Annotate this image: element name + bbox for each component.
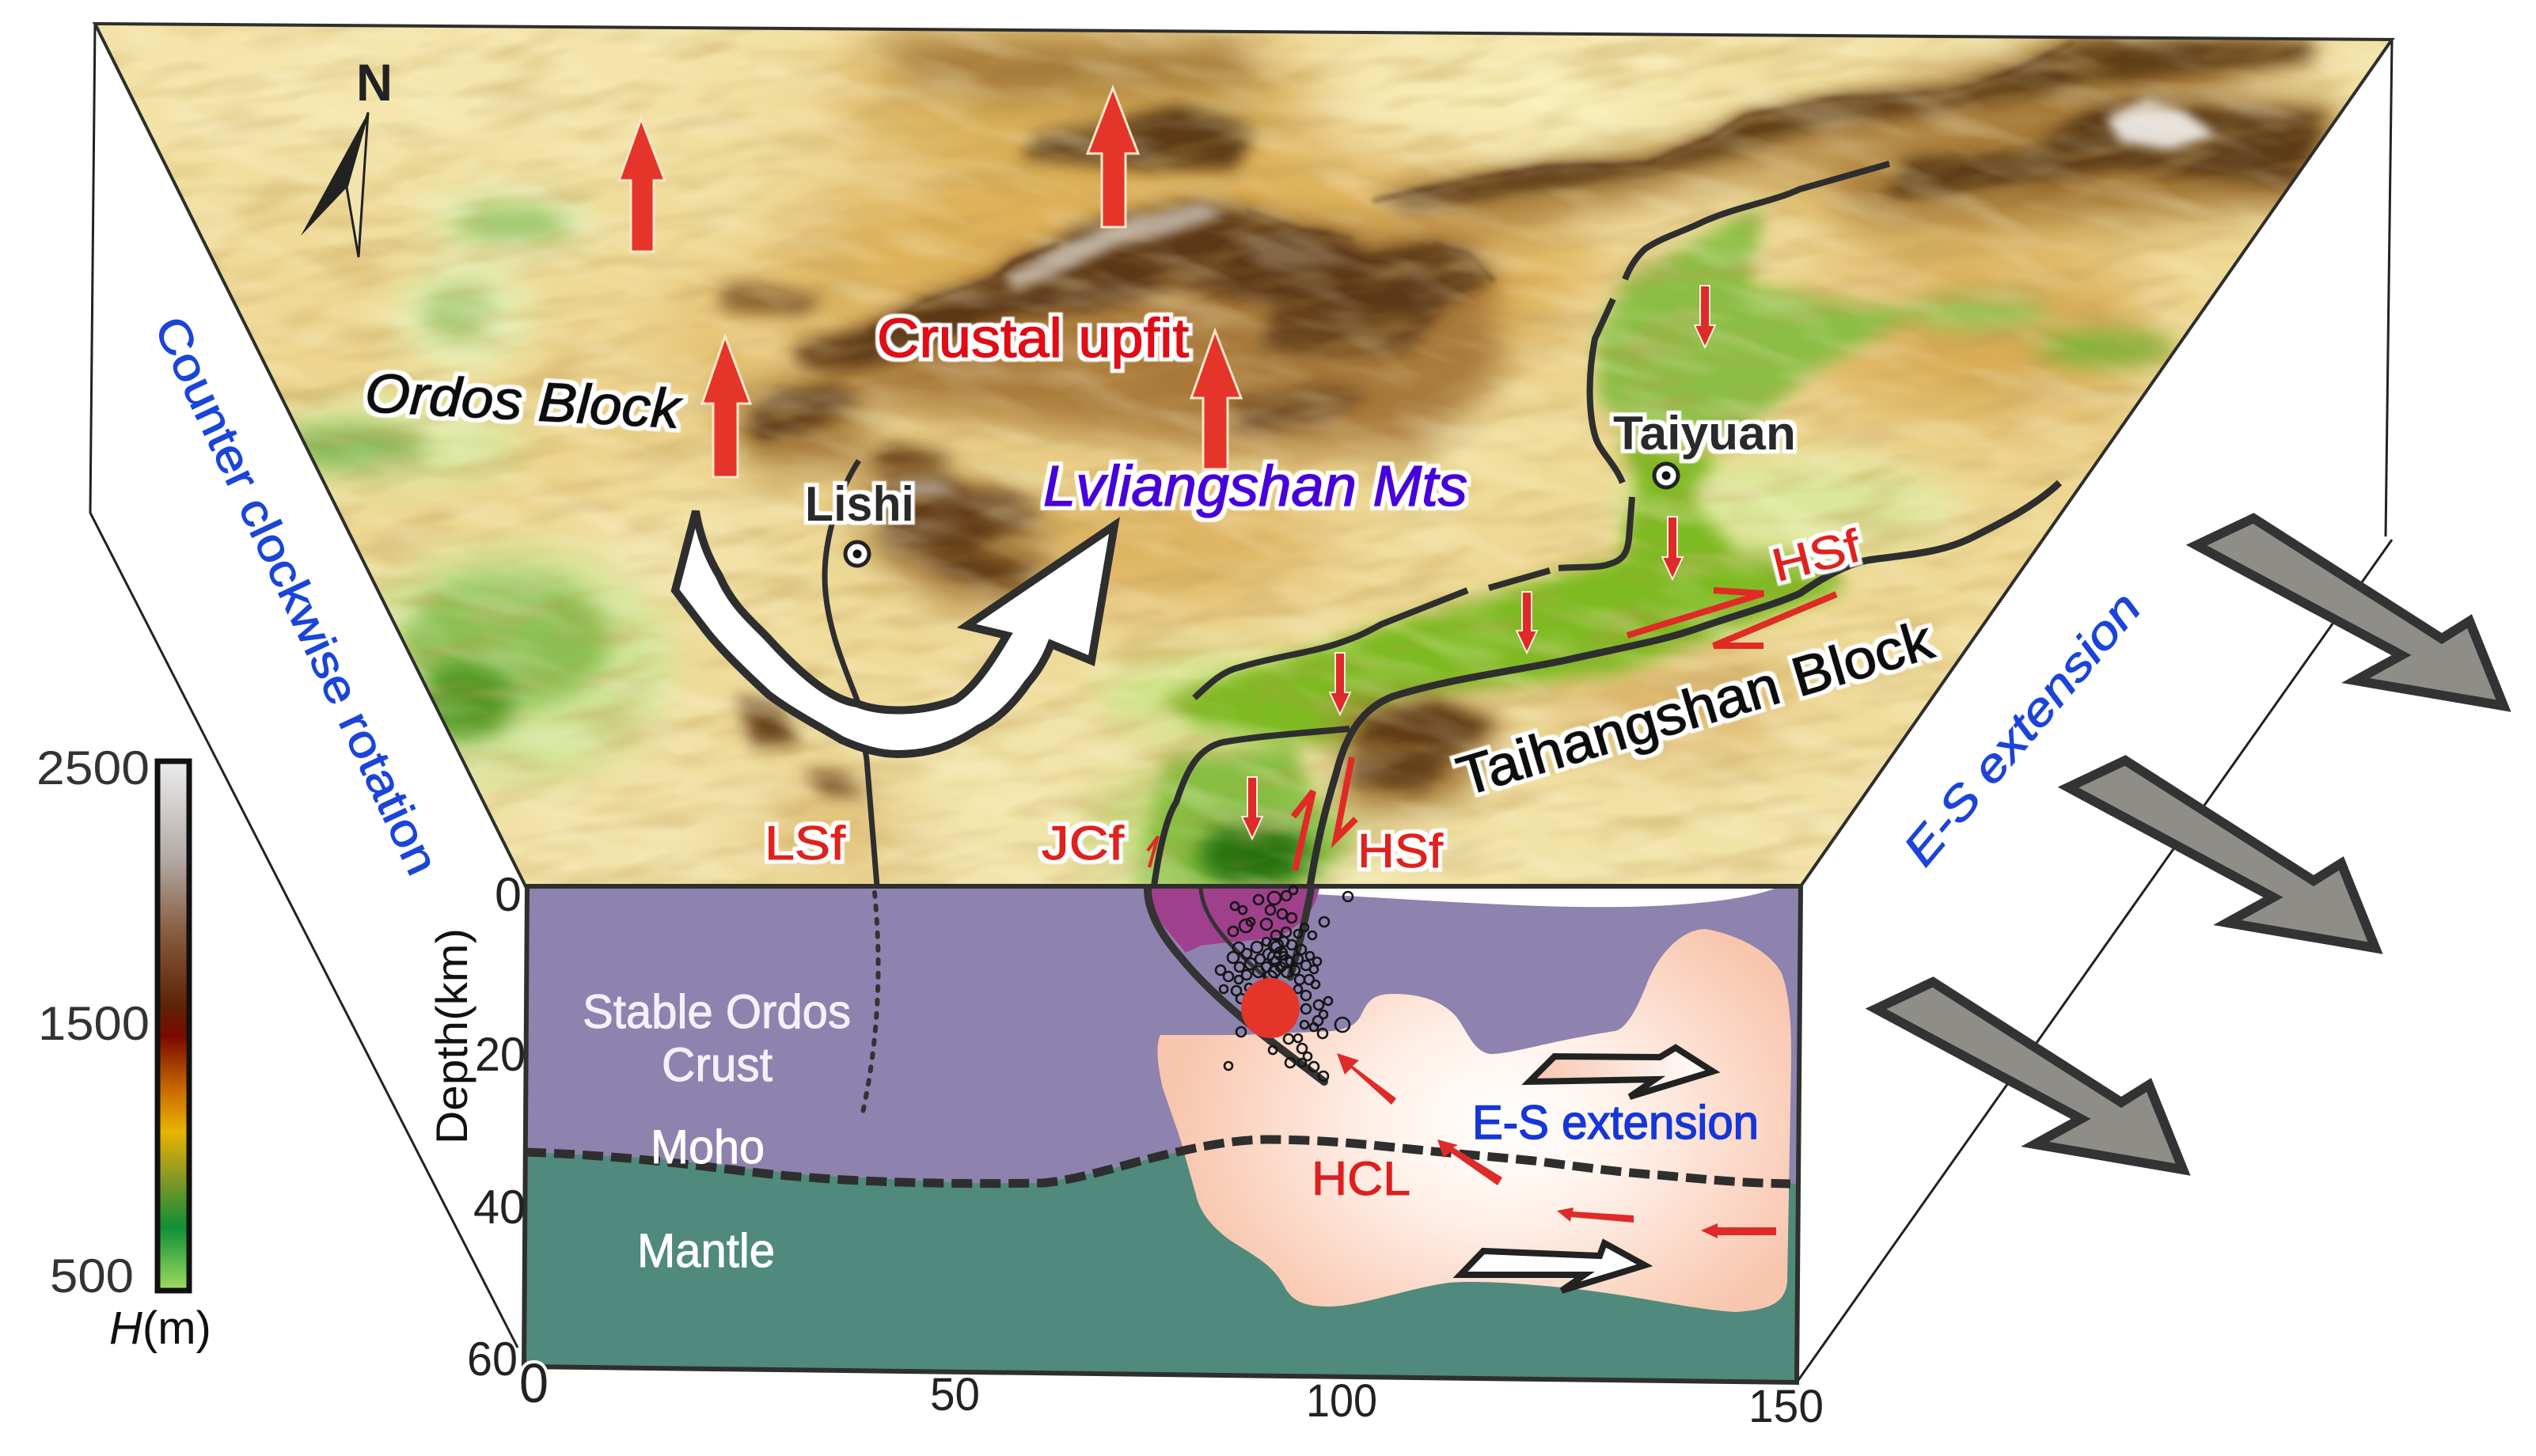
uplift arrow 4 [1191,331,1241,469]
red migration arrow c [1557,1208,1634,1223]
fault line graben west [1194,164,1889,698]
colour bar labels: 500 [50,1249,134,1302]
colour bar labels: 1500 [38,997,150,1050]
depth axis: 0 [495,868,522,921]
label: Ordos Block: Ordos Block [363,362,684,440]
fault line LSf [825,461,877,886]
magenta sediment zone [1148,889,1319,953]
hot crustal layer HCL [1157,929,1791,1312]
depth axis: 60 [467,1333,518,1386]
label: Lvliangshan Mts: Lvliangshan Mts [1043,455,1467,518]
fault line JCf [1154,729,1350,886]
fault line HSf [1310,483,2060,886]
label: LSf: LSf [765,817,845,870]
section label: Mantle: Mantle [637,1224,775,1277]
elevation colour bar [158,761,189,1291]
distance axis: 50 [930,1369,980,1420]
colour bar labels: H(m) [109,1302,211,1354]
colour bar labels: 2500 [36,741,150,794]
section frame [524,886,1801,1382]
left wall of block [90,24,518,1348]
depth axis: 40 [473,1181,526,1234]
grey extension arrow 3 [1876,982,2183,1170]
panel: terrain map surface [79,16,2414,902]
earthquake hypocentres [1216,886,1353,1081]
hypocentre: main earthquake [1241,978,1300,1038]
arrow: counter clockwise rotation [675,511,1114,754]
label: E-S extension wall: E-S extension [1893,582,2151,875]
white gap at section top [1314,888,1776,907]
label: Taihangshan Block: Taihangshan Block [1450,609,1941,807]
icon: north arrow [301,112,368,257]
section label: Stable Ordos Crust [583,985,851,1091]
label: counter clockwise rotation: Counter clockwise rotation [144,309,449,882]
red migration arrow d [1701,1223,1776,1238]
section label: HCL: HCL [1312,1152,1410,1205]
distance axis: 100 [1306,1375,1377,1427]
Moho dashed line [526,1139,1790,1184]
depth axis [467,868,526,1386]
red migration arrow b [1437,1139,1502,1185]
depth axis: 20 [475,1028,526,1081]
panel: cross-section background [524,886,1801,1382]
subsidence arrows [1242,286,1715,839]
uplift arrow 3 [702,336,750,477]
red migration arrow a [1337,1053,1396,1105]
city marker Lishi [845,542,869,566]
section label: Stable Ordos Crust: Stable Ordos [583,985,851,1038]
label: Lishi: Lishi [805,477,914,532]
hollow extension arrow upper [1529,1048,1713,1097]
hollow extension arrow lower [1460,1243,1645,1291]
strike-slip half arrows [1148,590,1836,870]
distance axis [519,1352,1824,1432]
section label: Moho: Moho [651,1120,765,1174]
right wall of block [1797,40,2392,1382]
label: Crustal uplift: Crustal upfit [877,307,1189,369]
north label: N [356,53,393,112]
colour bar labels [36,741,211,1354]
grey extension arrow 2 [2068,760,2375,948]
label: JCf: JCf [1042,817,1124,870]
grey extension arrow 1 [2196,518,2504,706]
buried fault lines [861,886,1324,1120]
distance axis: 0 [519,1352,549,1414]
section label: Stable Ordos Crust: Crust [662,1038,773,1091]
label: HSf upper: HSf [1767,520,1866,592]
label: HSf lower: HSf [1357,825,1443,878]
city marker Taiyuan [1654,464,1678,487]
label: Taiyuan: Taiyuan [1613,407,1796,460]
terrain outline [95,24,2392,886]
uplift arrow 2 [1088,88,1138,227]
mantle layer [524,1139,1798,1382]
uplift arrow 1 [619,119,665,252]
depth axis title: Depth(km) [427,928,476,1144]
distance axis: 150 [1748,1381,1824,1432]
section label: E-S extension: E-S extension [1472,1096,1759,1149]
